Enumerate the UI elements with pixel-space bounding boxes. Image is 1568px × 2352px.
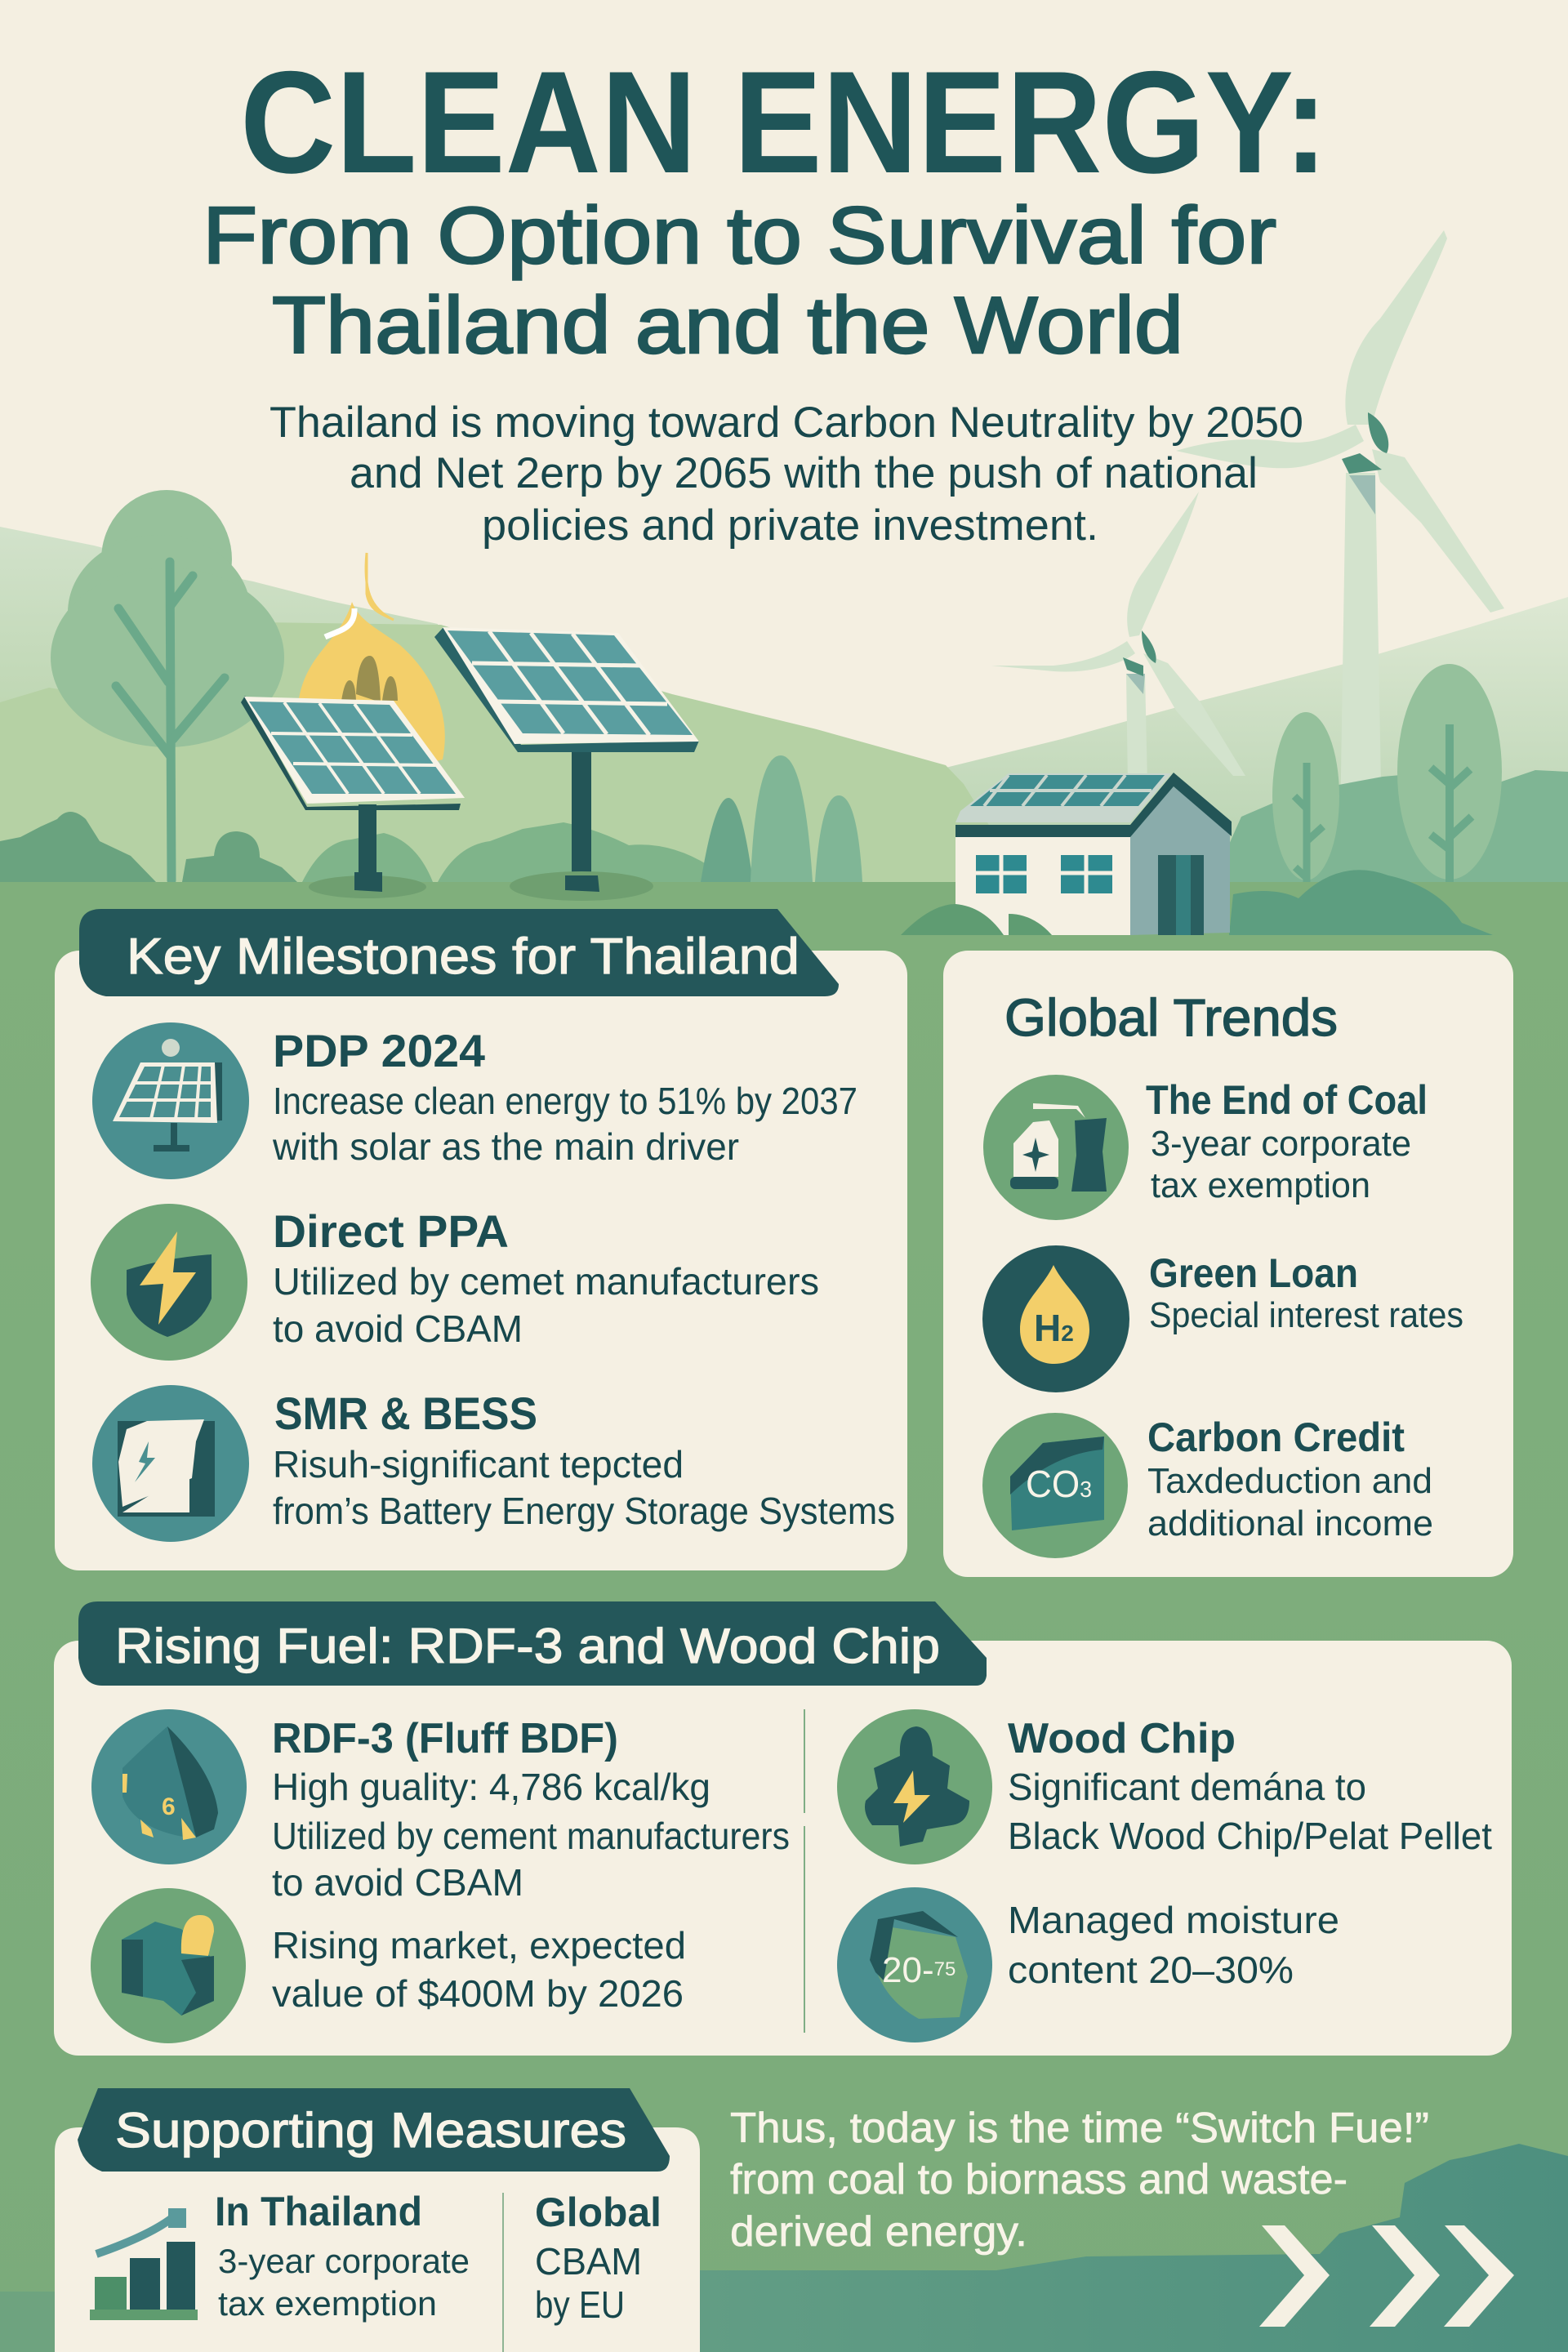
text: RDF-3 xyxy=(272,1715,790,1904)
tree right large xyxy=(1397,664,1502,909)
intro text xyxy=(270,399,1303,550)
text: green loan xyxy=(1149,1250,1463,1335)
text: in Thailand: 3-year corporate xyxy=(218,2242,470,2280)
heading ribbon xyxy=(79,909,839,996)
text: PDP 2024: PDP 2024 xyxy=(273,1025,485,1076)
text: Direct PPA: Direct PPA xyxy=(273,1205,509,1257)
conclusion text: derived energy. xyxy=(730,2208,1027,2256)
text: PDP 2024 xyxy=(272,1025,858,1168)
icon: battery storage xyxy=(92,1385,249,1542)
text: rising market: Rising market, expected xyxy=(272,1924,686,1967)
text: carbon credit: Carbon Credit xyxy=(1147,1414,1405,1460)
subtitle line 2: Thailand and the World xyxy=(272,280,1183,370)
wind turbine large xyxy=(1176,230,1504,874)
text: the end of coal: The End of Coal xyxy=(1146,1077,1428,1123)
text: wood chip: Wood Chip xyxy=(1008,1715,1236,1762)
text: SMR and BESS xyxy=(273,1388,895,1532)
heading ribbon xyxy=(78,2088,670,2172)
conclusion text: from coal to biornass and waste- xyxy=(730,2156,1348,2203)
text: the end of coal: 3-year corporate xyxy=(1151,1124,1411,1164)
text: carbon credit: Taxdeduction and xyxy=(1147,1461,1432,1501)
title xyxy=(203,41,1328,370)
far hills xyxy=(0,527,1568,890)
text: in Thailand: tax exemption xyxy=(218,2284,437,2323)
icon: hydrogen drop: H2 xyxy=(1034,1307,1074,1349)
text: global: CBAM xyxy=(535,2240,642,2283)
icon: solar panel xyxy=(92,1022,249,1179)
text: green loan: Green Loan xyxy=(1149,1250,1358,1296)
text: rising market xyxy=(272,1924,686,2015)
icon: wood chip tree xyxy=(837,1709,992,1864)
text: carbon credit xyxy=(1147,1414,1433,1544)
icon: moisture content xyxy=(837,1887,992,2042)
icon: growth bar chart xyxy=(90,2208,198,2320)
heading: Global Trends xyxy=(1004,988,1338,1047)
panel: supporting measures xyxy=(55,2088,700,2352)
text: Direct PPA xyxy=(273,1205,819,1350)
text: moisture xyxy=(1008,1899,1339,1991)
flame behind solar panel xyxy=(297,553,445,784)
text: rising market: value of $400M by 2026 xyxy=(272,1972,684,2015)
text: wood chip: Black Wood Chip/Pelat Pellet xyxy=(1008,1815,1492,1857)
icon: moisture content: 75 xyxy=(934,1958,956,1980)
intro text: Thailand is moving toward Carbon Neutrality by 2050 xyxy=(270,399,1303,447)
arrows: three chevrons xyxy=(1259,2225,1514,2327)
text: SMR and BESS: Risuh-significant tepcted xyxy=(273,1443,684,1486)
text: carbon credit: additional income xyxy=(1147,1503,1433,1544)
conclusion text xyxy=(730,2105,1429,2256)
intro text: and Net 2erp by 2065 with the push of national xyxy=(350,449,1258,497)
conclusion text: Thus, today is the time “Switch Fue!” xyxy=(730,2105,1429,2152)
text: wood chip xyxy=(1008,1715,1492,1857)
subtitle line 1: From Option to Survival for xyxy=(203,190,1276,280)
wind turbine small xyxy=(991,492,1245,784)
panel: global trends xyxy=(943,951,1513,1577)
icon: RDF fuel drop xyxy=(91,1709,247,1864)
bottom landscape band xyxy=(0,2144,1568,2352)
right mid-ground bushes xyxy=(1209,770,1568,890)
tree right small xyxy=(1272,712,1339,886)
heading ribbon xyxy=(78,1601,987,1686)
divider xyxy=(804,1709,805,2033)
text: in Thailand: In Thailand xyxy=(215,2189,422,2234)
text: RDF-3: Utilized by cement manufacturers xyxy=(272,1815,790,1857)
ground xyxy=(0,882,1568,2352)
text: SMR and BESS: SMR & BESS xyxy=(274,1388,537,1439)
heading ribbon: Supporting Measures xyxy=(115,2103,626,2158)
solar panel right xyxy=(434,627,699,901)
icon: end of coal xyxy=(983,1075,1129,1220)
panel: rising fuel xyxy=(54,1601,1512,2056)
icon: hydrogen drop xyxy=(982,1245,1129,1392)
icon: RDF fuel drop: 6 xyxy=(162,1793,176,1820)
text: green loan: Special interest rates xyxy=(1149,1295,1463,1335)
text: the end of coal xyxy=(1146,1077,1428,1205)
icon: carbon credit: CO3 xyxy=(1026,1463,1092,1505)
icon: moisture content: 20- xyxy=(882,1950,934,1990)
main heading: CLEAN ENERGY: xyxy=(240,41,1328,203)
house with rooftop solar xyxy=(901,773,1232,935)
text: RDF-3: High guality: 4,786 kcal/kg xyxy=(272,1766,710,1808)
text: global: Global xyxy=(535,2189,662,2235)
text: global: by EU xyxy=(535,2283,625,2326)
text: the end of coal: tax exemption xyxy=(1151,1165,1370,1205)
divider xyxy=(502,2193,504,2352)
solar panel left xyxy=(241,696,465,898)
text: Direct PPA: to avoid CBAM xyxy=(273,1307,523,1350)
icon: shield with lightning xyxy=(91,1204,247,1361)
text: global xyxy=(535,2189,662,2326)
sky background xyxy=(0,0,1568,890)
text: wood chip: Significant demána to xyxy=(1008,1766,1366,1808)
heading ribbon: Key Milestones for Thailand xyxy=(127,929,800,985)
panel: key milestones for Thailand xyxy=(55,909,907,1570)
text: RDF-3: RDF-3 (Fluff BDF) xyxy=(272,1715,618,1762)
tree left xyxy=(51,490,284,880)
icon: carbon credit xyxy=(982,1413,1128,1558)
text: moisture: Managed moisture xyxy=(1008,1899,1339,1941)
text: Direct PPA: Utilized by cemet manufacturers xyxy=(273,1260,819,1303)
bushes left xyxy=(0,755,862,882)
text: RDF-3: to avoid CBAM xyxy=(272,1861,523,1904)
intro text: policies and private investment. xyxy=(482,501,1098,550)
text: SMR and BESS: from’s Battery Energy Storage Systems xyxy=(273,1490,895,1532)
icon: rising market block xyxy=(91,1888,246,2043)
mid hill xyxy=(0,622,1029,890)
heading ribbon: Rising Fuel: RDF-3 and Wood Chip xyxy=(115,1619,940,1673)
text: in Thailand xyxy=(215,2189,470,2323)
text: moisture: content 20–30% xyxy=(1008,1949,1294,1991)
text: PDP 2024: Increase clean energy to 51% by 2037 xyxy=(273,1080,858,1122)
text: PDP 2024: with solar as the main driver xyxy=(272,1125,739,1168)
bushes near house xyxy=(1229,870,1493,935)
